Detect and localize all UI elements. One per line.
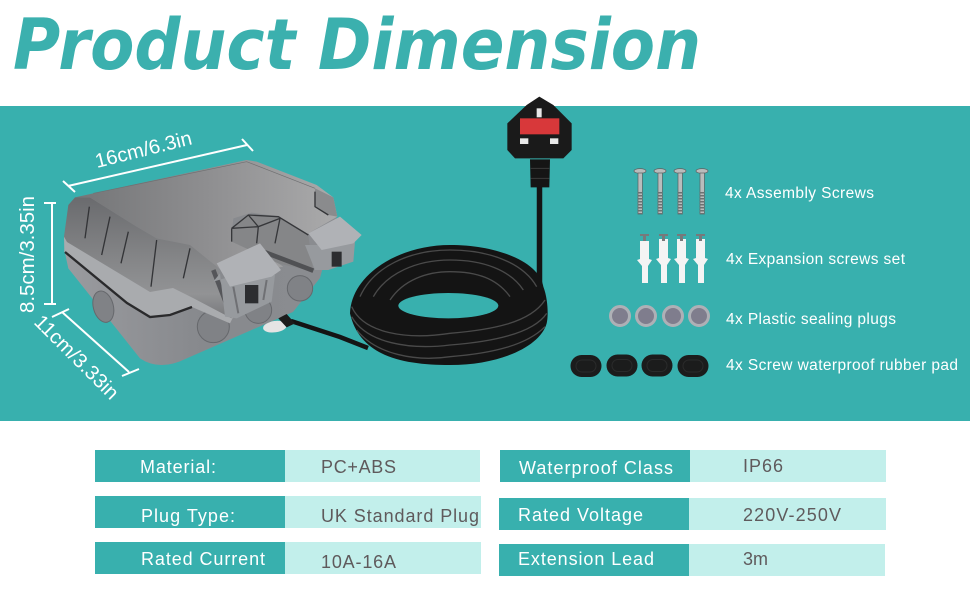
spec row: material xyxy=(95,450,480,482)
accessory labels xyxy=(725,185,958,374)
spec row: plug type xyxy=(95,496,481,528)
accessory labels: 4x Screw waterproof rubber pad xyxy=(726,357,958,374)
icon: expansion screws xyxy=(637,234,708,283)
cable gland xyxy=(262,319,288,334)
dimension: height 8.5cm xyxy=(17,196,56,313)
spec row: rated current: Rated Current xyxy=(141,549,265,569)
icon: plastic sealing plugs xyxy=(610,306,708,326)
cable ferrule xyxy=(278,314,295,327)
spec row: plug type: Plug Type: xyxy=(141,506,235,526)
spec row: rated current: 10A-16A xyxy=(321,552,396,572)
spec row: rated current xyxy=(95,542,481,574)
socket flap front xyxy=(213,273,275,318)
accessory labels: 4x Expansion screws set xyxy=(726,251,906,268)
spec row: extension lead xyxy=(499,544,885,576)
icon: rubber pads xyxy=(570,354,708,377)
icon: assembly screws xyxy=(634,169,708,214)
spec row: material: Material: xyxy=(140,457,216,477)
title: Product Dimension xyxy=(13,4,701,86)
cable coil xyxy=(350,245,548,365)
box body xyxy=(64,160,337,365)
lid front dome xyxy=(64,197,232,318)
spec row: extension lead: 3m xyxy=(743,549,768,569)
spec row: material: PC+ABS xyxy=(321,457,396,477)
spec row: waterproof class: IP66 xyxy=(743,456,783,476)
lid rear dome xyxy=(232,215,313,272)
spec row: rated voltage: 220V-250V xyxy=(743,505,841,525)
accessory labels: 4x Assembly Screws xyxy=(725,185,874,202)
socket flap rear xyxy=(305,242,355,270)
dimension: depth 11cm: 11cm/3.33in xyxy=(29,311,123,404)
plug cable xyxy=(537,186,542,285)
panel: teal product band xyxy=(0,106,970,421)
spec row: plug type: UK Standard Plug xyxy=(321,506,479,526)
spec row: extension lead: Extension Lead xyxy=(518,549,654,569)
weatherproof box xyxy=(64,160,362,365)
dimension: width 16cm xyxy=(63,128,253,192)
rim and gasket xyxy=(64,237,233,323)
lid top surface xyxy=(75,160,337,277)
dimension: height 8.5cm: 8.5cm/3.35in xyxy=(17,196,39,313)
icon: UK plug xyxy=(507,97,572,187)
spec row: rated voltage: Rated Voltage xyxy=(518,505,643,525)
spec row: rated voltage xyxy=(499,498,886,530)
spec row: waterproof class: Waterproof Class xyxy=(519,458,673,478)
spec row: waterproof class xyxy=(500,450,886,482)
power cable from box to coil xyxy=(291,321,368,348)
dimension: width 16cm: 16cm/6.3in xyxy=(93,128,194,173)
accessory labels: 4x Plastic sealing plugs xyxy=(726,311,896,328)
knockouts xyxy=(90,276,313,343)
